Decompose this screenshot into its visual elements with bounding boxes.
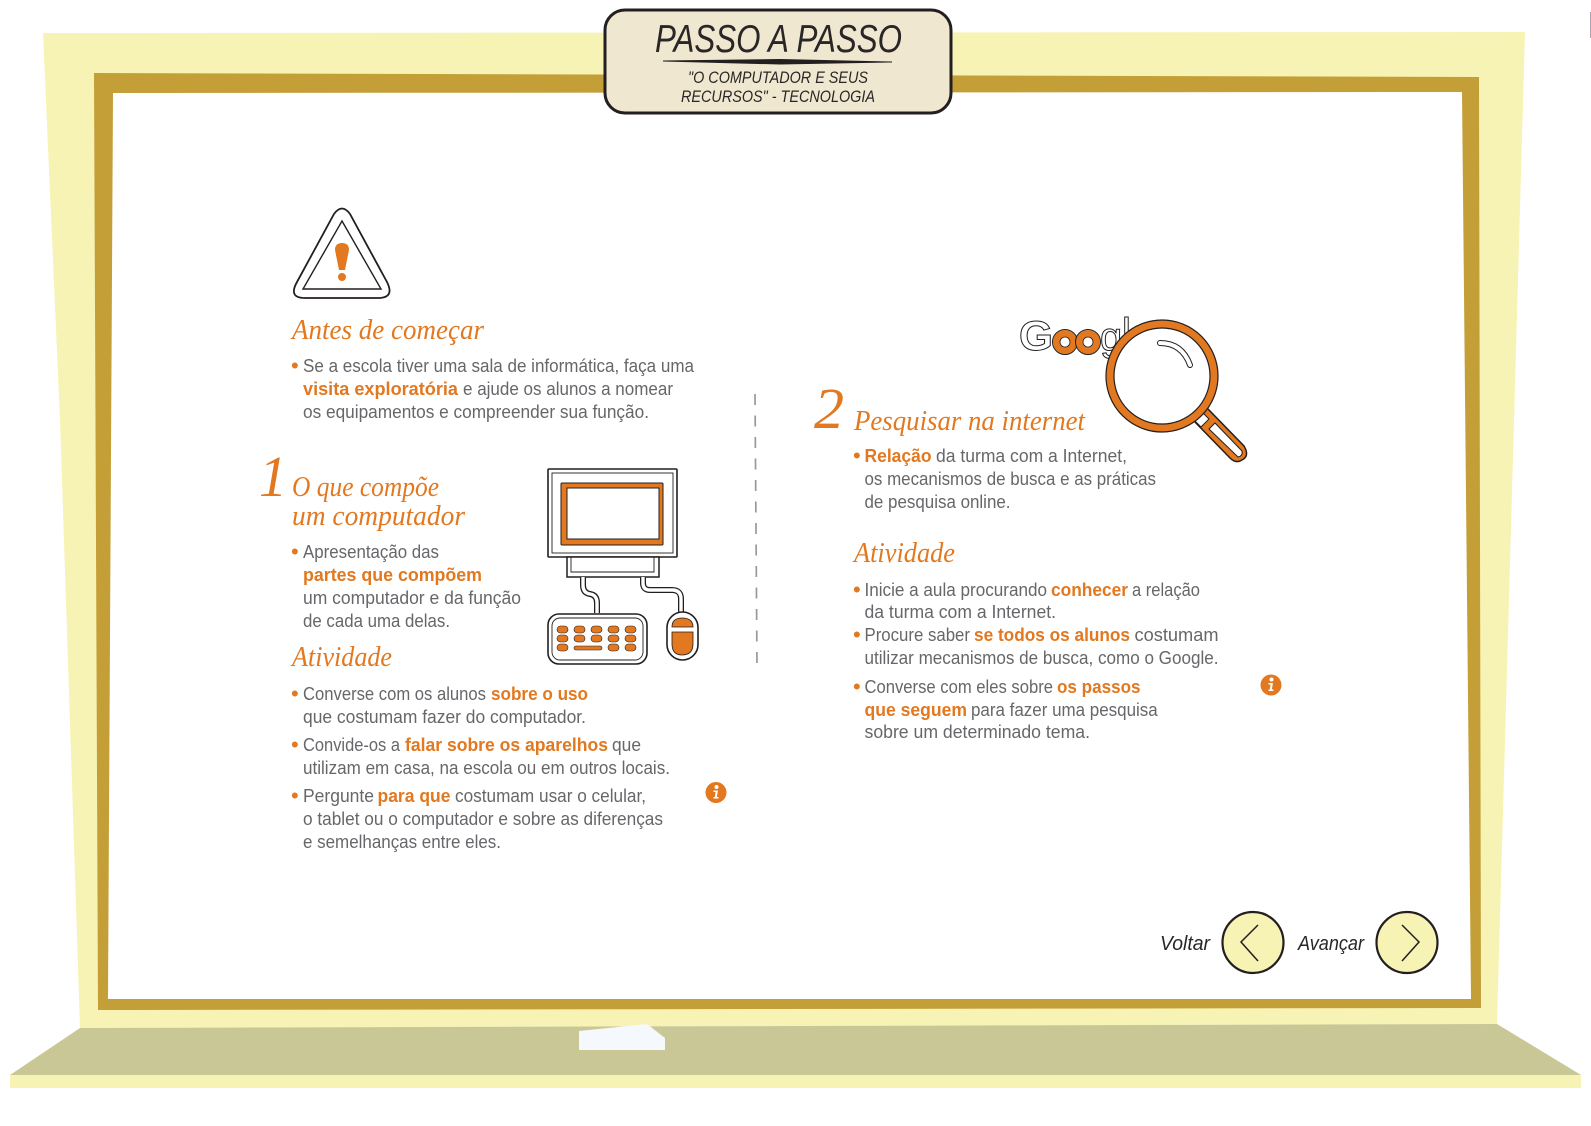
icon: info coluna 2 bbox=[1260, 674, 1282, 696]
text block: antes de começar: e ajude os alunos a nomear bbox=[463, 379, 673, 399]
text block: o que compõe: de cada uma delas. bbox=[303, 611, 450, 631]
icon: info coluna 1 bbox=[706, 782, 726, 803]
text block: o que compõe: • bbox=[291, 539, 299, 564]
icon: Google magnifier bbox=[1019, 311, 1247, 462]
text block: pesquisar bbox=[853, 443, 1156, 512]
Google word: G bbox=[1019, 312, 1053, 359]
nav: voltar label: Voltar bbox=[1160, 933, 1211, 955]
subtitle bbox=[681, 68, 875, 106]
heading: O que compõe um computador bbox=[292, 472, 465, 532]
text block: atividade coluna 1: Pergunte bbox=[303, 786, 374, 806]
chalk tray bbox=[10, 1024, 1581, 1088]
text block: pesquisar: de pesquisa online. bbox=[864, 492, 1010, 512]
Google word bbox=[1019, 311, 1131, 359]
text block: pesquisar: • bbox=[853, 443, 861, 468]
text block: atividade coluna 1: Convide-os a bbox=[303, 735, 401, 755]
text block: antes de começar: os equipamentos e compreender sua função. bbox=[303, 402, 649, 422]
text block: atividade coluna 1: o tablet ou o computador e sobre as diferenças bbox=[303, 809, 663, 829]
text block: atividade coluna 2: sobre um determinado tema. bbox=[864, 722, 1090, 742]
handle bbox=[1194, 408, 1247, 462]
chalk bbox=[579, 1024, 665, 1050]
text block: atividade coluna 1: e semelhanças entre eles. bbox=[303, 832, 501, 852]
text block: pesquisar: da turma com a Internet, bbox=[936, 446, 1127, 466]
text block: atividade coluna 2: os passos bbox=[1057, 677, 1140, 697]
text block: atividade coluna 1 bbox=[291, 681, 670, 852]
icon: computer bbox=[548, 469, 698, 664]
text block: atividade coluna 2: utilizar mecanismos de busca, como o Google. bbox=[864, 648, 1218, 668]
text block: atividade coluna 2: • bbox=[853, 622, 861, 647]
text block: atividade coluna 2 bbox=[853, 577, 1218, 742]
text block: pesquisar: os mecanismos de busca e as práticas bbox=[864, 469, 1156, 489]
text block: pesquisar: Relação bbox=[864, 446, 932, 466]
text block: atividade coluna 1: • bbox=[291, 732, 299, 757]
text block: atividade coluna 2: Procure saber bbox=[864, 625, 970, 645]
text block: atividade coluna 2: conhecer bbox=[1051, 580, 1128, 600]
text block: atividade coluna 2: da turma com a Internet. bbox=[864, 602, 1056, 622]
heading: O que compõe um computador: O que compõe bbox=[292, 472, 439, 503]
number 2: 2 bbox=[814, 376, 844, 441]
text block: atividade coluna 1: Converse com os alunos bbox=[303, 684, 486, 704]
heading: Atividade (coluna 2): Atividade bbox=[852, 538, 955, 569]
text block: atividade coluna 1: costumam usar o celular, bbox=[455, 786, 646, 806]
icon: warning triangle bbox=[294, 208, 390, 298]
text block: atividade coluna 2: • bbox=[853, 577, 861, 602]
text block: atividade coluna 2: Converse com eles sobre bbox=[864, 677, 1053, 697]
text block: atividade coluna 1: que bbox=[612, 735, 641, 755]
text block: antes de começar: visita exploratória bbox=[303, 379, 459, 399]
text block: antes de começar: • bbox=[291, 353, 299, 378]
text block: atividade coluna 2: costumam bbox=[1134, 625, 1218, 645]
text block: atividade coluna 1: utilizam em casa, na escola ou em outros locais. bbox=[303, 758, 670, 778]
edge mark top right bbox=[1590, 12, 1591, 38]
Google word: l bbox=[1122, 311, 1131, 355]
subtitle: RECURSOS" - TECNOLOGIA bbox=[681, 87, 875, 106]
text block: atividade coluna 2: Inicie a aula procurando bbox=[864, 580, 1047, 600]
lens bbox=[1110, 324, 1214, 428]
nav: avançar button bbox=[1376, 912, 1438, 973]
text block: antes de começar: Se a escola tiver uma sala de informática, faça uma bbox=[303, 356, 695, 376]
nav: voltar button bbox=[1222, 912, 1284, 973]
text block: o que compõe bbox=[291, 539, 521, 631]
text block: atividade coluna 2: para fazer uma pesquisa bbox=[971, 700, 1159, 720]
text block: antes de começar bbox=[291, 353, 695, 422]
text block: atividade coluna 1: sobre o uso bbox=[491, 684, 588, 704]
text block: atividade coluna 1: • bbox=[291, 783, 299, 808]
Google word: g bbox=[1100, 315, 1122, 359]
text block: o que compõe: partes que compõem bbox=[303, 565, 482, 585]
text block: atividade coluna 2: se todos os alunos bbox=[974, 625, 1130, 645]
title plaque bbox=[605, 10, 951, 113]
text block: atividade coluna 1: falar sobre os aparelhos bbox=[405, 735, 608, 755]
text block: atividade coluna 1: que costumam fazer do computador. bbox=[303, 707, 586, 727]
subtitle: "O COMPUTADOR E SEUS bbox=[688, 68, 869, 87]
nav: avançar label: Avançar bbox=[1297, 933, 1365, 955]
text block: atividade coluna 2: a relação bbox=[1132, 580, 1200, 600]
heading: Pesquisar na internet: Pesquisar na internet bbox=[853, 406, 1086, 437]
heading: Antes de começar: Antes de começar bbox=[290, 315, 484, 346]
column divider bbox=[755, 394, 757, 665]
title underline bbox=[663, 60, 892, 64]
text block: o que compõe: Apresentação das bbox=[303, 542, 439, 562]
number 1: 1 bbox=[259, 444, 287, 509]
text block: atividade coluna 1: para que bbox=[378, 786, 450, 806]
heading: O que compõe um computador: um computador bbox=[292, 501, 465, 532]
text block: atividade coluna 2: • bbox=[853, 674, 861, 699]
title: PASSO A PASSO bbox=[655, 18, 902, 61]
text block: atividade coluna 2: que seguem bbox=[864, 700, 967, 720]
heading: Atividade (coluna 1): Atividade bbox=[290, 642, 392, 673]
text block: atividade coluna 1: • bbox=[291, 681, 299, 706]
text block: o que compõe: um computador e da função bbox=[303, 588, 521, 608]
